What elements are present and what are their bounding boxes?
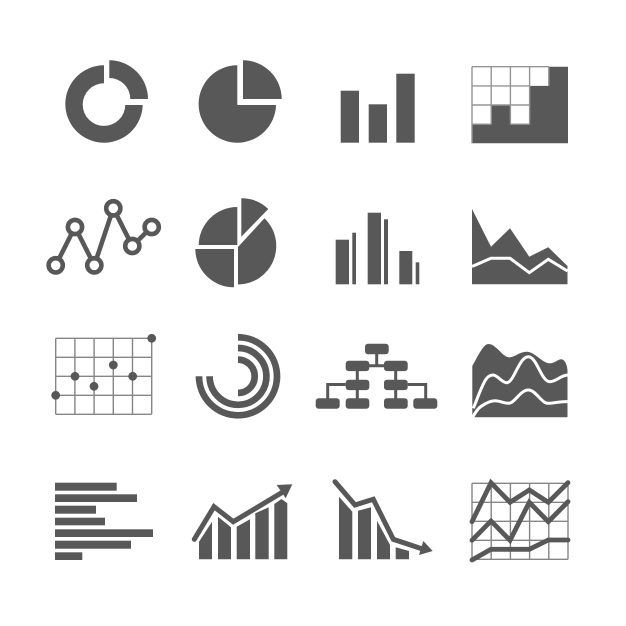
icon: horizontal bar chart	[55, 483, 153, 560]
icon: stepped grid chart	[472, 67, 568, 143]
icon: scatter plot on grid	[51, 334, 156, 414]
icon: falling bars with arrow	[335, 482, 433, 559]
icon: paired bar chart	[336, 213, 419, 284]
icon: organization flow chart	[316, 344, 437, 409]
icon: line chart with circular nodes	[49, 201, 159, 272]
icon: pie chart with quarter slice	[199, 60, 282, 143]
icon: donut chart	[65, 60, 148, 143]
icon: radial progress chart	[199, 337, 277, 415]
icon: rising bars with arrow	[194, 484, 292, 559]
icon: multi-line chart on grid	[472, 483, 568, 560]
icon: wavy stacked area chart	[472, 344, 568, 418]
icon: pie chart with four slices	[195, 198, 276, 287]
icon: layered area chart	[472, 209, 568, 284]
icon: three bar chart	[341, 74, 415, 143]
